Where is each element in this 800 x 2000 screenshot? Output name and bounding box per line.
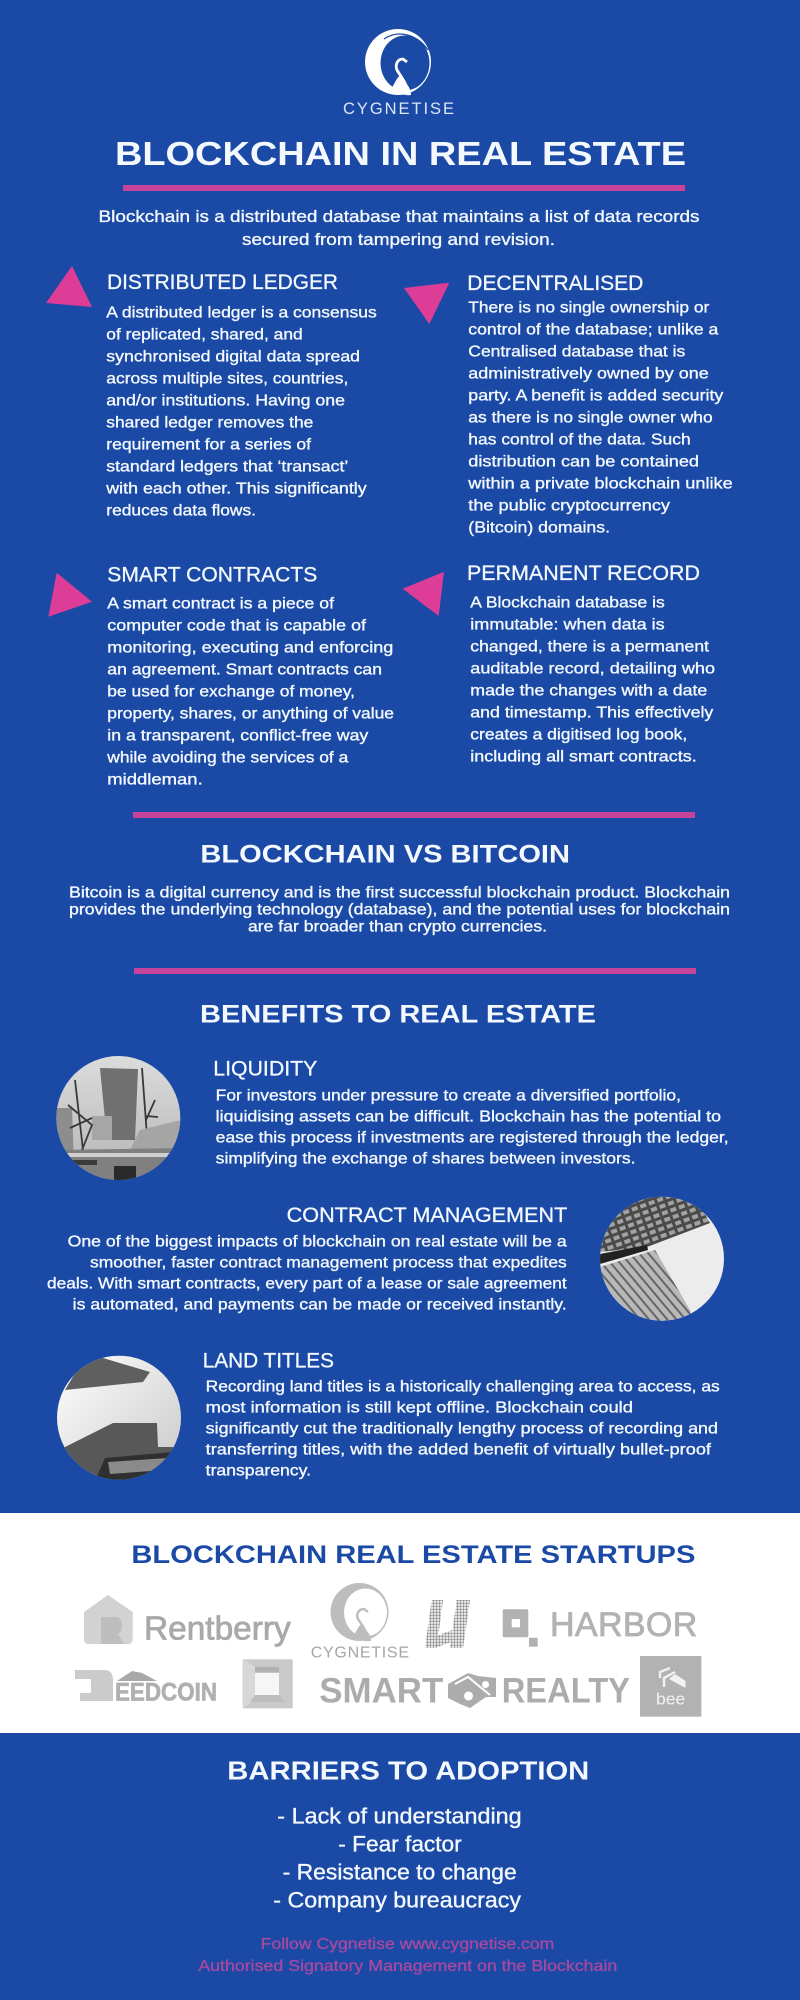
logo: Smart Realty: SMART <box>319 1672 443 1711</box>
body text: including all smart contracts. <box>470 748 697 765</box>
body text <box>106 595 394 788</box>
icon: triangle left <box>403 572 444 616</box>
logo: Deedcoin <box>75 1670 217 1706</box>
body text: smoother, faster contract management process that expedites <box>90 1254 567 1271</box>
body text: with each other. This significantly <box>105 480 367 497</box>
body text: deals. With smart contracts, every part of a lease or sale agreement <box>47 1275 567 1292</box>
heading: benefits: BENEFITS TO REAL ESTATE <box>200 1001 596 1029</box>
logo: Deedcoin: EEDCOIN <box>115 1678 217 1706</box>
body text: across multiple sites, countries, <box>106 370 348 387</box>
body text: Recording land titles is a historically challenging area to access, as <box>206 1379 720 1396</box>
heading: startups: BLOCKCHAIN REAL ESTATE STARTUPS <box>131 1541 695 1569</box>
logo: halftone U <box>425 1600 470 1648</box>
wordmark: CYGNETISE <box>343 100 454 118</box>
body text: distribution can be contained <box>468 453 699 470</box>
logo: Smart Realty <box>319 1672 630 1711</box>
body text: while avoiding the services of a <box>106 749 348 766</box>
body text: A smart contract is a piece of <box>107 595 335 612</box>
body text <box>216 1087 729 1167</box>
panel: decentralised <box>404 272 733 536</box>
icon: handshake with gears <box>448 1673 496 1708</box>
logo: square frame <box>243 1659 293 1708</box>
body text: in a transparent, conflict-free way <box>107 727 368 744</box>
heading: LIQUIDITY <box>213 1058 317 1081</box>
list: barriers: - Lack of understanding <box>277 1803 522 1828</box>
icon: swan ring <box>365 29 431 95</box>
logo: Cygnetise gray: CYGNETISE <box>311 1644 409 1661</box>
photo: buildings from below <box>56 1355 182 1481</box>
intro text: secured from tampering and revision. <box>242 230 555 249</box>
list: barriers: - Resistance to change <box>283 1860 517 1885</box>
footer text: Authorised Signatory Management on the Blockchain <box>198 1958 617 1975</box>
body text: administratively owned by one <box>468 365 709 382</box>
body text: liquidising assets can be difficult. Blockchain has the potential to <box>216 1108 721 1125</box>
body text: Centralised database that is <box>468 343 685 360</box>
body text: control of the database; unlike a <box>468 321 718 338</box>
logo: Smart Realty: REALTY <box>502 1672 630 1711</box>
logo: bee: bee <box>656 1689 685 1708</box>
body text <box>467 299 733 536</box>
body text: creates a digitised log book, <box>470 726 687 743</box>
heading: CONTRACT MANAGEMENT <box>287 1204 567 1227</box>
body text: party. A benefit is added security <box>468 387 723 404</box>
body text: transparency. <box>206 1463 311 1480</box>
body text: the public cryptocurrency <box>468 497 670 514</box>
body text: requirement for a series of <box>106 436 312 453</box>
heading: PERMANENT RECORD <box>467 562 700 585</box>
body text: A distributed ledger is a consensus <box>106 304 377 321</box>
text block: bitcoin explanation: Bitcoin is a digital currency and is the first successful blockchain product. Blockchain <box>69 884 730 901</box>
body text: property, shares, or anything of value <box>107 705 394 722</box>
intro text <box>98 207 700 249</box>
body text: as there is no single owner who <box>468 409 713 426</box>
title underline <box>123 185 685 191</box>
body text <box>105 304 377 519</box>
logo: bee <box>640 1656 701 1717</box>
footer text <box>198 1936 617 1975</box>
list: barriers: - Fear factor <box>338 1832 462 1857</box>
body text: auditable record, detailing who <box>470 660 715 677</box>
heading: LAND TITLES <box>203 1350 334 1373</box>
body text <box>206 1379 720 1480</box>
body text: made the changes with a date <box>470 682 707 699</box>
panel: contract management <box>47 1196 725 1322</box>
text block: bitcoin explanation <box>69 884 730 935</box>
heading: barriers: BARRIERS TO ADOPTION <box>227 1755 589 1785</box>
body text: ease this process if investments are registered through the ledger, <box>216 1129 729 1146</box>
body text: standard ledgers that ‘transact’ <box>106 458 348 475</box>
panel: liquidity <box>56 1056 729 1182</box>
panel: startups band <box>0 1513 800 1733</box>
body text: simplifying the exchange of shares between investors. <box>216 1150 635 1167</box>
body text: middleman. <box>107 771 203 788</box>
logo: Harbor: HARBOR <box>550 1606 697 1644</box>
intro text: Blockchain is a distributed database that maintains a list of data records <box>98 207 700 226</box>
body text: and/or institutions. Having one <box>106 392 345 409</box>
list: barriers: - Company bureaucracy <box>273 1888 521 1913</box>
body text <box>470 594 715 765</box>
logo: Rentberry: Rentberry <box>144 1609 291 1646</box>
body text: monitoring, executing and enforcing <box>107 639 393 656</box>
body text <box>47 1233 567 1313</box>
body text: synchronised digital data spread <box>106 348 360 365</box>
icon: triangle right <box>48 573 92 617</box>
body text: be used for exchange of money, <box>107 683 355 700</box>
text block: bitcoin explanation: are far broader than crypto currencies. <box>248 918 547 935</box>
panel: smart contracts <box>48 563 394 788</box>
body text: immutable: when data is <box>470 616 665 633</box>
body text: within a private blockchain unlike <box>467 475 733 492</box>
photo: skyscrapers from below <box>600 1196 725 1322</box>
body text: changed, there is a permanent <box>470 638 710 655</box>
logo: Cygnetise gray <box>311 1583 409 1661</box>
icon: triangle up <box>46 266 92 307</box>
logo: Cygnetise <box>343 29 454 118</box>
heading: DISTRIBUTED LEDGER <box>107 271 338 294</box>
heading: blockchain vs bitcoin: BLOCKCHAIN VS BITCOIN <box>200 841 570 869</box>
body text: and timestamp. This effectively <box>470 704 713 721</box>
photo: tower and cranes <box>56 1056 181 1182</box>
heading: DECENTRALISED <box>467 272 643 295</box>
body text: For investors under pressure to create a diversified portfolio, <box>216 1087 681 1104</box>
heading: SMART CONTRACTS <box>107 563 317 586</box>
body text: (Bitcoin) domains. <box>468 519 610 536</box>
panel: land titles <box>56 1350 720 1481</box>
panel: distributed ledger <box>46 266 377 519</box>
body text: significantly cut the traditionally lengthy process of recording and <box>206 1421 718 1438</box>
body text: has control of the data. Such <box>468 431 691 448</box>
body text: One of the biggest impacts of blockchain on real estate will be a <box>68 1233 567 1250</box>
footer text: Follow Cygnetise www.cygnetise.com <box>261 1936 554 1953</box>
body text: reduces data flows. <box>106 502 256 519</box>
body text: There is no single ownership or <box>468 299 710 316</box>
panel: permanent record <box>403 562 715 765</box>
title: BLOCKCHAIN IN REAL ESTATE <box>115 136 686 173</box>
body text: is automated, and payments can be made or received instantly. <box>73 1296 567 1313</box>
body text: A Blockchain database is <box>470 594 665 611</box>
list: barriers <box>273 1803 522 1913</box>
logo: Rentberry <box>84 1595 291 1646</box>
divider bar <box>134 968 696 974</box>
body text: shared ledger removes the <box>106 414 313 431</box>
divider bar <box>133 812 695 818</box>
body text: most information is still kept offline. Blockchain could <box>206 1400 633 1417</box>
body text: transferring titles, with the added benefit of virtually bullet-proof <box>206 1442 712 1459</box>
body text: of replicated, shared, and <box>106 326 303 343</box>
icon: triangle down <box>404 283 449 324</box>
text block: bitcoin explanation: provides the underlying technology (database), and the potential uses for blockchain <box>69 901 730 918</box>
body text: computer code that is capable of <box>107 617 367 634</box>
body text: an agreement. Smart contracts can <box>107 661 382 678</box>
